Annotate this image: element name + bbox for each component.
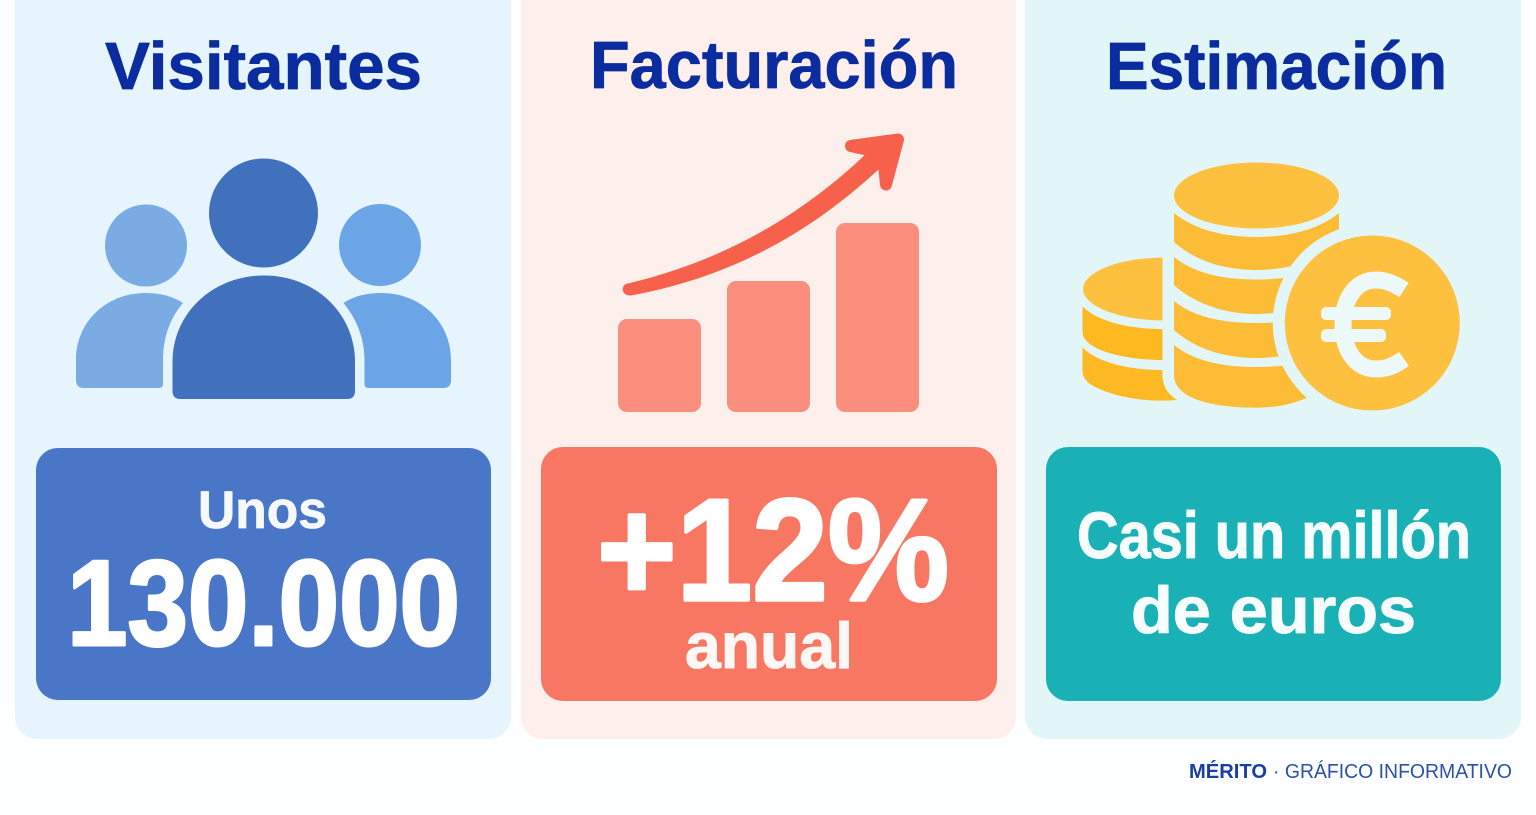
value box: +12% anual [541,447,997,701]
text: Unos: Unos [198,481,327,540]
left person [76,204,187,388]
text: anual: anual [685,609,853,682]
panel: Visitantes [15,0,511,739]
small coin stack [1082,258,1177,401]
heading: Facturación: Facturación [590,28,958,103]
value box: Casi un millón de euros [1046,447,1501,701]
panel: Facturación [521,0,1016,739]
panel: Estimación [1025,0,1521,739]
centre person [172,158,355,399]
euro coin [1273,224,1472,422]
icon: coins with euro [1082,162,1472,422]
icon: group of people [76,158,451,399]
bars [618,223,919,412]
footer credit: · GRÁFICO INFORMATIVO [1273,760,1512,783]
heading: Visitantes: Visitantes [105,29,422,104]
value box: Unos 130.000 [36,448,491,700]
number: +12%: +12% [597,469,949,631]
text: Casi un millón: Casi un millón [1077,498,1471,572]
footer credit: MÉRITO [1189,760,1267,783]
tall coin stack [1174,162,1339,408]
heading: Estimación: Estimación [1106,29,1447,104]
icon: rising bar chart [618,140,919,412]
arrow [623,140,898,296]
right person [339,204,451,388]
number: 130.000: 130.000 [67,535,460,671]
text: de euros: de euros [1131,573,1416,647]
footer credit [1189,760,1512,783]
